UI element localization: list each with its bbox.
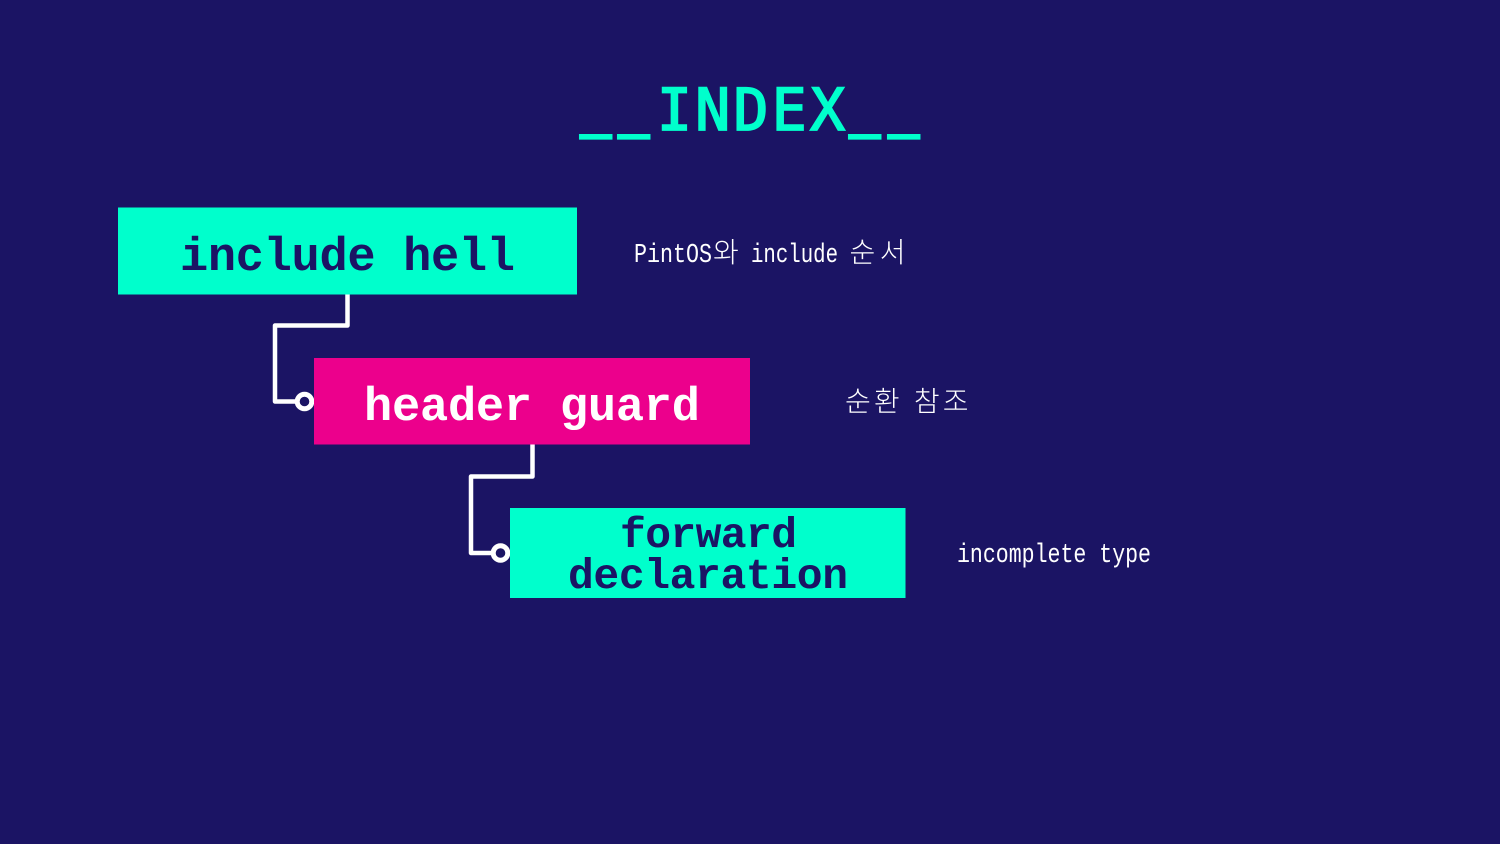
note: PintOS and include order: 순서 xyxy=(850,231,906,271)
note: PintOS and include order: PintOS xyxy=(634,241,712,271)
note: PintOS and include order: 와 xyxy=(713,231,739,271)
box: forward declaration xyxy=(510,508,906,601)
box: header guard xyxy=(314,358,750,444)
box: forward declaration: forward xyxy=(620,511,797,560)
box: include hell xyxy=(118,208,577,294)
title xyxy=(580,69,920,144)
note: PintOS and include order xyxy=(634,231,906,271)
note: circular reference: 순환 참조 xyxy=(845,380,968,420)
connector: include hell to header guard xyxy=(275,294,348,409)
title: _ xyxy=(888,69,920,139)
box: include hell: include hell xyxy=(180,232,515,285)
note: incomplete type: incomplete type xyxy=(957,541,1151,571)
box: forward declaration: declaration xyxy=(568,552,848,601)
title: _ xyxy=(849,69,881,139)
box: header guard: header guard xyxy=(364,382,700,435)
note: PintOS and include order: include xyxy=(751,241,838,271)
connector: header guard to forward declaration xyxy=(471,444,532,560)
title: INDEX xyxy=(657,76,845,144)
title: _ xyxy=(618,69,650,139)
title: _ xyxy=(580,69,612,139)
